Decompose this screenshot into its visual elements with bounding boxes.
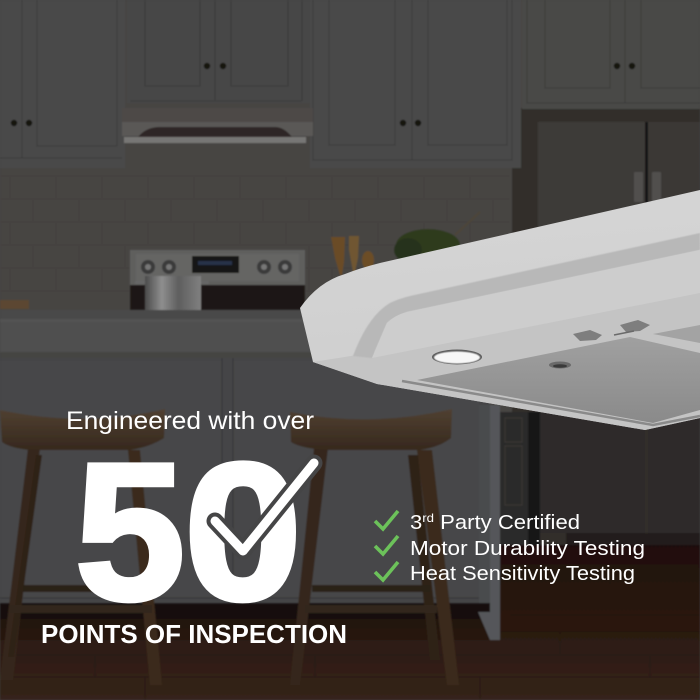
utensils (331, 236, 374, 275)
backsplash tiles (0, 176, 510, 291)
cabinet: upper left (0, 0, 125, 168)
product: range hood (300, 190, 700, 430)
icon: green check 1 (375, 511, 398, 529)
cabinet: upper centre (127, 0, 312, 103)
big number 50 with checkmark: 5 (75, 423, 185, 641)
hood underside (313, 292, 700, 430)
big number 50 with checkmark: 0 (184, 423, 302, 641)
checklist (375, 511, 645, 585)
hood light (432, 350, 482, 364)
stove (122, 250, 307, 322)
floor (0, 545, 700, 700)
item: third party certified: rd (422, 511, 434, 525)
lower cabinets (0, 358, 528, 610)
stool right (290, 409, 459, 685)
subheading: points of inspection: POINTS OF INSPECTION (41, 619, 347, 649)
item: third party certified: Party Certified (434, 512, 580, 534)
cutting board on counter (0, 300, 29, 309)
far right dark alcove (512, 108, 700, 548)
icon: green check 3 (375, 562, 398, 580)
countertop (0, 310, 512, 358)
item: third party certified: 3 (410, 512, 421, 534)
second hood filter (653, 325, 700, 343)
item: heat sensitivity testing: Heat Sensitivity Testing (410, 563, 635, 585)
plant (394, 212, 480, 262)
hood control buttons (573, 330, 602, 341)
hood fascia (372, 250, 700, 358)
item: motor durability testing: Motor Durability Testing (410, 538, 645, 560)
cabinet: far right (522, 0, 700, 109)
stool left (0, 409, 165, 685)
heading: engineered with over: Engineered with over (66, 407, 314, 435)
hood lamp port (549, 362, 571, 368)
big number 50 with checkmark (75, 423, 314, 641)
cabinet: upper right (310, 0, 521, 168)
hood filter (417, 337, 700, 423)
small background range hood (122, 108, 313, 143)
hood recessed band (353, 233, 700, 358)
icon: green check 2 (375, 536, 398, 554)
refrigerator (528, 122, 700, 545)
island side panel (478, 405, 500, 640)
